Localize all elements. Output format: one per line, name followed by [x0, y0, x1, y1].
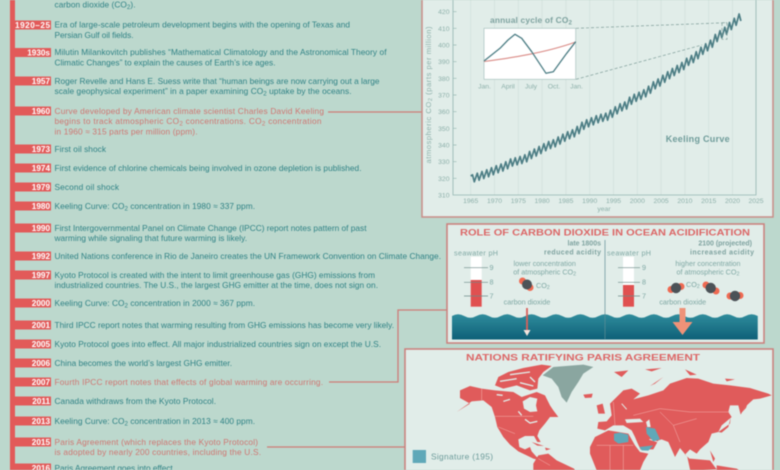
x axis labels: 2000: [630, 198, 645, 205]
entry: 1980: concentration in 1980 ≈ 337 ppm.: [128, 201, 255, 211]
entry: 1990: First Intergovernmental Panel on Climate Change (IPCC) report notes pattern of past: [54, 223, 367, 233]
entry: 1930s: 1930s: [27, 48, 50, 58]
entry: 1960: 2: [179, 121, 183, 128]
entry: 1990: [15, 223, 367, 243]
y axis title: (parts per million): [424, 26, 433, 97]
inset: annual cycle of CO2: 2: [569, 20, 573, 26]
left column: late 1800s: [454, 240, 601, 336]
panel: nations ratifying Paris Agreement: [405, 349, 773, 470]
panel: ocean acidification: [447, 224, 764, 343]
entry: 1960: begins to track atmospheric CO: [54, 116, 179, 126]
entry: 1957: scale geophysical experiment” in a paper examining CO: [54, 86, 263, 96]
y axis labels: 380: [438, 76, 450, 83]
entry: 1957: Roger Revelle and Hans E. Suess write that “human beings are now carrying out a large: [54, 76, 380, 86]
entry: 2001: 2001: [32, 321, 50, 330]
Cuba and Hispaniola: [532, 442, 544, 446]
pH thermometer: [464, 257, 494, 307]
pH thermometer: 7: [642, 292, 646, 300]
entry: 1980: 2: [125, 206, 129, 212]
entry: 1957: [15, 76, 380, 98]
entry: 1973: 1973: [32, 145, 50, 154]
x axis labels: 2010: [677, 198, 693, 205]
y axis labels: 410: [438, 26, 450, 33]
y axis labels: [438, 9, 450, 200]
inset: annual cycle of CO2: Jan.: [478, 84, 491, 90]
entry: 2015: Paris Agreement (which replaces the Kyoto Protocol): [54, 437, 258, 447]
y axis labels: 360: [438, 109, 450, 116]
x axis labels: 2005: [654, 198, 669, 205]
entry: 2013: concentration in 2013 ≈ 400 ppm.: [128, 416, 255, 426]
entry: 1960: 2: [262, 121, 266, 128]
inset: annual cycle of CO2: annual cycle of CO: [490, 15, 568, 25]
entry: 1990: 1990: [32, 224, 50, 233]
entry: 1973: [15, 144, 107, 154]
icon: CO2 molecules: [668, 282, 744, 301]
y axis labels: 390: [438, 59, 450, 66]
Black Sea and Caspian: [625, 419, 643, 423]
left column: late 1800s: carbon dioxide: [504, 298, 550, 306]
connector lines from timeline to panels: [267, 112, 448, 447]
right column: 2100 projected: [607, 240, 754, 335]
Keeling curve line: [471, 14, 741, 182]
zoom guide dashed lines: [576, 23, 727, 79]
map: Europe, Africa, Asia: [590, 368, 772, 470]
entry: 2007: Fourth IPCC report notes that effects of global warming are occurring.: [54, 377, 323, 387]
inset: annual cycle of CO2: [478, 15, 583, 90]
entry: 2011: Canada withdraws from the Kyoto Protocol.: [54, 396, 216, 406]
entry: 1979: [15, 182, 120, 192]
entry: 1973: First oil shock: [54, 144, 107, 154]
entry: 1997: 1997: [32, 271, 50, 280]
entry: 1930s: [15, 47, 387, 68]
country borders: [597, 402, 730, 470]
x axis labels: 1985: [558, 198, 574, 205]
right column: 2100 projected: CO: [686, 280, 697, 289]
arrow: large CO2 flux: [672, 308, 692, 335]
right column: 2100 projected: of atmospheric CO: [677, 268, 736, 276]
entry: carbon dioxide: 2: [127, 4, 131, 11]
country borders: [482, 389, 550, 465]
y axis labels: 420: [438, 9, 450, 16]
entry: 1957: 2: [263, 91, 267, 98]
entry: 2015: is adopted by nearly 200 countries, including the U.S.: [54, 447, 261, 457]
entry: 2005: Kyoto Protocol goes into effect. All major industrialized countries sign on except the U.S.: [54, 339, 381, 349]
left column: late 1800s: late 1800s: [568, 240, 601, 248]
x axis labels: 2025: [748, 198, 764, 205]
pH thermometer: [618, 257, 646, 307]
chart label: Keeling Curve: Keeling Curve: [666, 134, 730, 144]
Iran: [646, 427, 660, 441]
legend: Signature (195): [413, 450, 493, 463]
y axis title: atmospheric CO: [424, 102, 433, 164]
entry: 1920-25: 1920–25: [15, 21, 50, 30]
water: [452, 314, 758, 340]
entry: 1980: Keeling Curve: CO: [54, 201, 124, 211]
x axis labels: 1980: [535, 198, 550, 205]
left column: late 1800s: CO: [536, 281, 547, 290]
x axis labels: 2020: [725, 198, 740, 205]
UK: [597, 404, 605, 414]
entry: 2000: 2: [125, 302, 129, 310]
entry: 1997: Kyoto Protocol is created with the intent to limit greenhouse gas (GHG) emissions from: [54, 270, 375, 280]
inset: annual cycle of CO2: April: [501, 84, 515, 90]
y axis labels: 330: [438, 159, 450, 166]
entry: 1960: Curve developed by American climate scientist Charles David Keeling: [54, 106, 324, 116]
divider: [604, 240, 606, 339]
entry: 2013: 2: [125, 420, 129, 427]
y axis title: 2: [428, 98, 434, 101]
arctic islands: [614, 368, 735, 386]
entry: 2006: 2006: [32, 359, 50, 368]
entry: 1979: 1979: [32, 183, 50, 192]
right column: 2100 projected: seawater pH: [607, 248, 651, 258]
Japan: [718, 417, 731, 433]
entry: 2000: concentration in 2000 ≈ 367 ppm.: [128, 298, 255, 308]
x axis labels: 1995: [606, 198, 621, 205]
Greenland: [543, 365, 593, 403]
x axis labels: 1965: [463, 198, 478, 205]
entry: 1957: 1957: [32, 77, 50, 86]
pH thermometer: 8: [642, 278, 646, 286]
left column: late 1800s: reduced acidity: [544, 250, 601, 256]
entry: 1920-25: Persian Gulf oil fields.: [54, 30, 134, 40]
entry: 2006: China becomes the world’s largest GHG emitter.: [54, 358, 232, 368]
y axis labels: 400: [438, 42, 450, 50]
entry: 1960: [15, 106, 324, 137]
y axis labels: 310: [438, 192, 450, 200]
left column: late 1800s: seawater pH: [454, 248, 498, 258]
y axis labels: 350: [438, 126, 450, 133]
pH thermometer: 9: [490, 263, 494, 272]
heading: NATIONS RATIFYING PARIS AGREEMENT: [466, 352, 700, 363]
x axis labels: 2015: [701, 198, 716, 205]
y axis labels: 370: [438, 92, 450, 100]
x axis labels: year: [597, 206, 611, 213]
right column: 2100 projected: 2: [697, 284, 700, 290]
x axis labels: [463, 198, 764, 213]
icon: CO2 molecule: [519, 278, 534, 291]
pH thermometer: 7: [490, 292, 494, 300]
entry: 2000: 2000: [32, 299, 50, 308]
entry: 1990: warming while signaling that future warming is likely.: [54, 233, 247, 243]
right column: 2100 projected: increased acidity: [690, 250, 754, 256]
entry: 1979: Second oil shock: [54, 182, 120, 192]
left column: late 1800s: of atmospheric CO: [513, 268, 573, 276]
entry: 2005: 2005: [32, 340, 50, 349]
entry: 1960: 1960: [32, 107, 50, 116]
entry: 1957: uptake by the oceans.: [267, 86, 352, 96]
legend: Signature (195): Signature (195): [431, 452, 493, 462]
entry: 2000: Keeling Curve: CO: [54, 298, 124, 308]
inset: annual cycle of CO2: Oct.: [548, 84, 560, 90]
entry: 2007: 2007: [32, 378, 50, 387]
y axis labels: 320: [438, 176, 450, 183]
Iceland: [583, 394, 593, 398]
map: Americas and Greenland: [457, 365, 593, 470]
right column: 2100 projected: carbon dioxide: [659, 298, 706, 306]
entry: 1992: United Nations conference in Rio de Janeiro creates the UN Framework Convention on Climate Change.: [54, 251, 441, 261]
inset: annual cycle of CO2: July: [525, 84, 538, 90]
Hudson Bay: [523, 397, 537, 412]
right column: 2100 projected: 2: [736, 272, 739, 278]
entry: 1997: [15, 270, 378, 290]
left column: late 1800s: lower concentration: [514, 259, 576, 268]
heading: ROLE OF CARBON DIOXIDE IN OCEAN ACIDIFICATION: [460, 228, 750, 239]
x axis labels: 1990: [582, 198, 597, 205]
entry: 1960: concentrations. CO: [183, 116, 262, 126]
entry: 1920-25: [15, 20, 350, 40]
timeline: [10, 0, 441, 470]
x axis labels: 1975: [511, 198, 526, 205]
entry: 2001: Third IPCC report notes that warming resulting from GHG emissions has become very likely.: [54, 320, 394, 330]
entry: 2013: 2013: [32, 417, 50, 426]
entry: 2011: 2011: [32, 397, 50, 406]
entry: 1960: concentration: [266, 116, 322, 126]
inset: annual cycle of CO2: Jan.: [570, 84, 583, 90]
Kamchatka: [742, 401, 748, 413]
Southeast Asia islands: [690, 450, 740, 470]
Oman: [639, 445, 653, 451]
entry: 1930s: Climatic Changes” to explain the causes of Earth’s ice ages.: [54, 58, 276, 68]
left column: late 1800s: 2: [547, 285, 550, 291]
timeline spine: [10, 0, 15, 470]
Libya: [614, 433, 628, 444]
entry: 1980: 1980: [32, 202, 50, 211]
entry: 2013: Keeling Curve: CO: [54, 416, 124, 426]
entry: 1960: in 1960 ≈ 315 parts per million (ppm).: [54, 127, 198, 137]
North America: [457, 386, 558, 461]
entry: 1992: 1992: [32, 252, 50, 261]
entry: 1980: [15, 201, 255, 212]
entry: 2015: 2015: [32, 438, 50, 447]
entry: 2015: [15, 437, 261, 457]
Arctic archipelago: [495, 365, 552, 390]
entry: 1997: industrialized countries. The U.S., the largest GHG emitter at the time, does not sign on.: [54, 280, 378, 290]
entry: 1920-25: Era of large-scale petroleum development begins with the opening of Texas and: [54, 20, 350, 30]
x axis labels: 1970: [487, 198, 502, 205]
entry: 1930s: Milutin Milankovitch publishes “Mathematical Climatology and the Astronomical Theory of: [54, 47, 387, 57]
pH thermometer: 9: [642, 263, 646, 272]
right column: 2100 projected: 2100 (projected): [698, 240, 752, 248]
Eurasia: [597, 378, 772, 469]
panel: Keeling Curve chart: [422, 0, 773, 217]
Africa: [590, 430, 648, 470]
Arctic channels and lakes: [497, 372, 537, 423]
left column: late 1800s: 2: [573, 272, 576, 278]
chart axes: [453, 0, 756, 195]
South America: [533, 454, 575, 470]
y axis labels: 340: [438, 142, 450, 150]
entry: 1974: First evidence of chlorine chemicals being involved in ozone depletion is published.: [54, 163, 362, 173]
entry: 1974: 1974: [32, 164, 50, 173]
entry: 2000: [15, 298, 255, 310]
entry: 2013: [15, 416, 255, 427]
pH thermometer: 8: [490, 278, 494, 286]
arrow: small CO2 flux: [524, 308, 530, 336]
right column: 2100 projected: higher concentration: [675, 259, 741, 268]
